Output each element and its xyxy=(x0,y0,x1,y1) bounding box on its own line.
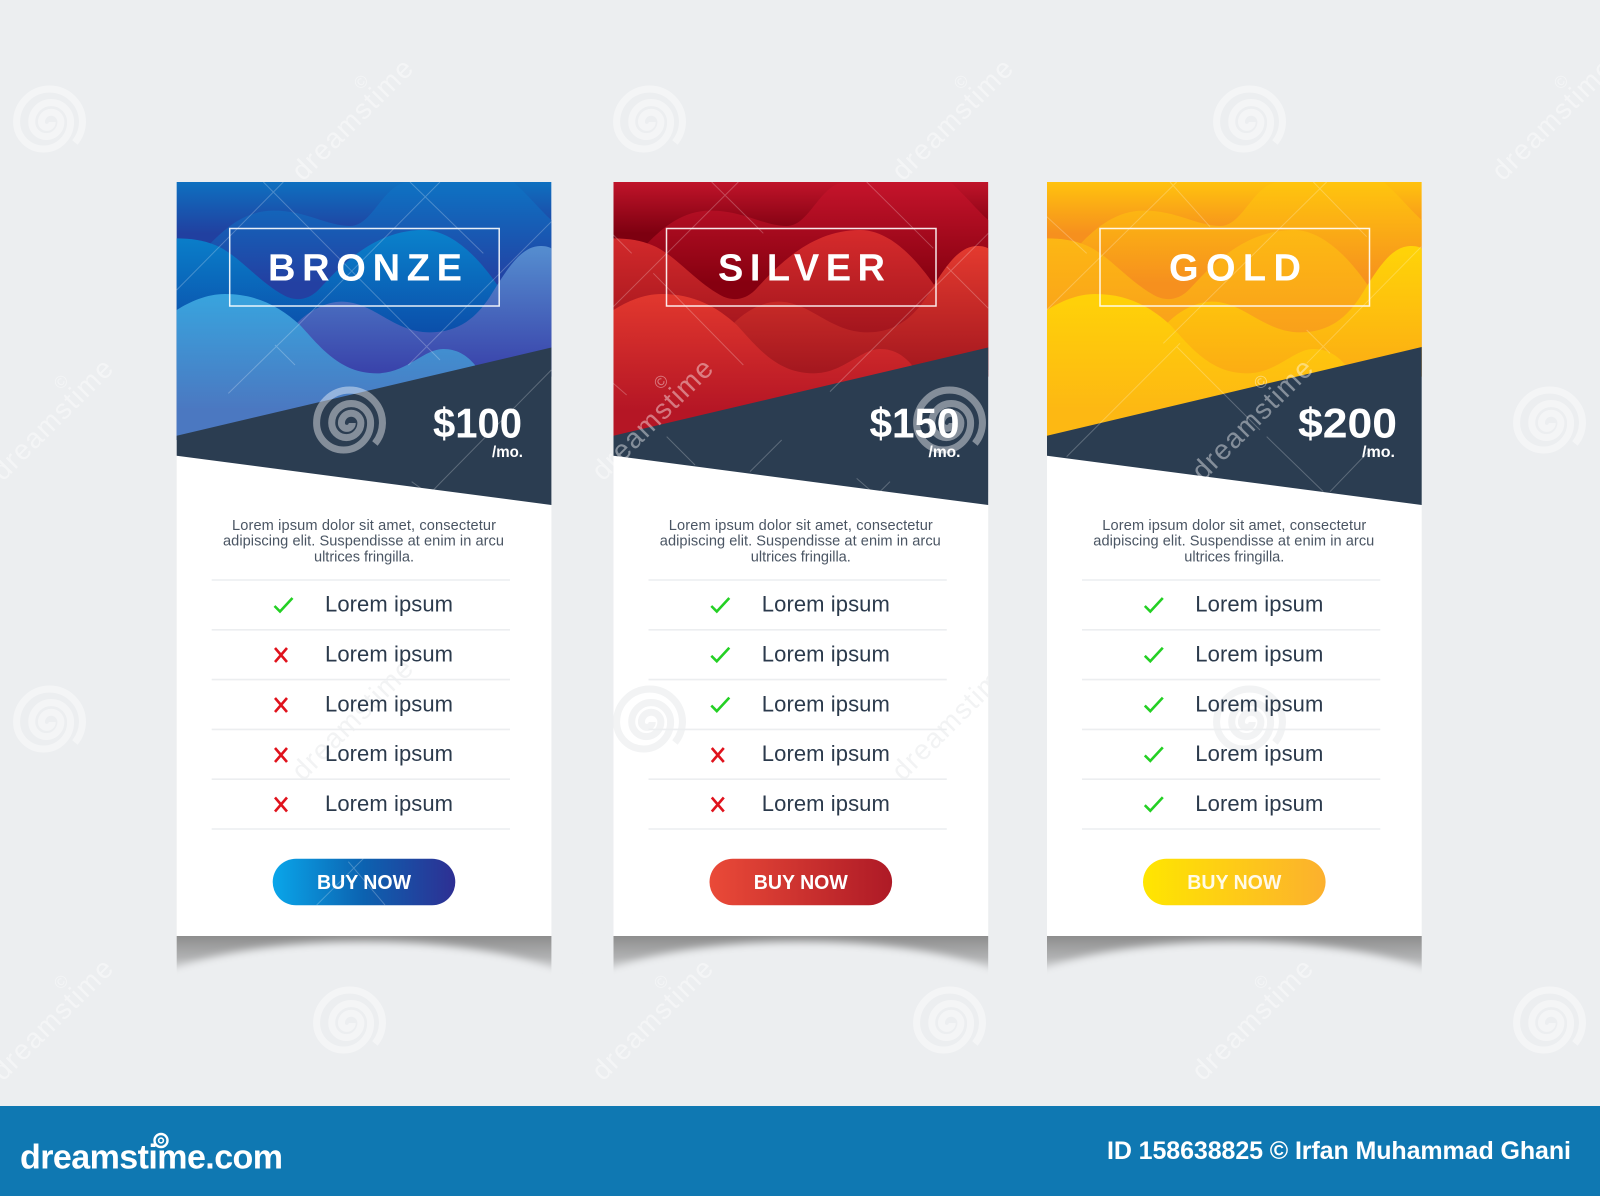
row 3 excluded: Lorem ipsum xyxy=(325,691,453,716)
description xyxy=(223,518,504,566)
watermark diagonal text: dreamstime xyxy=(1185,953,1319,1086)
buy button xyxy=(710,859,892,905)
row 5 included: Lorem ipsum xyxy=(1195,791,1323,816)
row 2 included: Lorem ipsum xyxy=(1195,642,1323,666)
image credit: ID 158638825 © Irfan Muhammad Ghani xyxy=(1107,1137,1571,1165)
wave header xyxy=(177,182,551,440)
panel: gold plan xyxy=(1008,182,1460,1062)
feature list xyxy=(1082,580,1380,829)
feature list xyxy=(648,580,947,829)
feature list xyxy=(212,580,510,829)
watermark diagonal text: © xyxy=(1250,371,1273,393)
row 4 excluded: Lorem ipsum xyxy=(762,741,890,766)
panel: silver plan xyxy=(575,182,1027,1062)
row 1 included: Lorem ipsum xyxy=(762,592,890,617)
card shadow xyxy=(575,936,1027,1062)
faint watermark on card: dreamstime xyxy=(285,653,419,786)
price: $150 xyxy=(870,400,960,447)
watermark diagonal text: dreamstime xyxy=(285,53,419,186)
row 4 excluded: Lorem ipsum xyxy=(325,741,453,766)
card shadow xyxy=(1008,936,1460,1062)
row 5 excluded: Lorem ipsum xyxy=(325,791,453,816)
watermark diagonal text: dreamstime xyxy=(885,53,1019,186)
watermark diagonal text: © xyxy=(1550,71,1573,93)
row 5 excluded: Lorem ipsum xyxy=(762,791,890,816)
row 2 excluded: Lorem ipsum xyxy=(325,642,453,666)
watermark diagonal lines on bronze xyxy=(177,182,551,905)
plan title box xyxy=(1100,228,1370,306)
description: Lorem ipsum dolor sit amet, consectetur xyxy=(1102,518,1366,534)
row 4 included: Lorem ipsum xyxy=(1195,741,1323,766)
price: $200 xyxy=(1298,400,1397,447)
footer logo: dreamstime.com xyxy=(20,1139,283,1177)
price: /mo. xyxy=(1362,444,1395,461)
plan title box: BRONZE xyxy=(268,248,462,290)
watermark diagonal text: © xyxy=(1250,971,1273,993)
description: Lorem ipsum dolor sit amet, consectetur xyxy=(232,518,496,534)
faint watermark on card: dreamstime xyxy=(885,653,1019,786)
faint watermark spiral on card xyxy=(1217,689,1282,749)
buy button xyxy=(273,859,455,905)
plan title box xyxy=(666,228,936,306)
card body xyxy=(1047,182,1422,936)
watermark diagonal text: © xyxy=(350,71,373,93)
watermark diagonal text: © xyxy=(50,371,73,393)
row 3 included: Lorem ipsum xyxy=(762,691,890,716)
description: ultrices fringilla. xyxy=(314,550,414,566)
watermark diagonal text: dreamstime xyxy=(585,353,719,486)
watermark diagonal text: dreamstime xyxy=(1185,353,1319,486)
card shadow xyxy=(138,936,590,1062)
watermark diagonal text: © xyxy=(950,71,973,93)
description: Lorem ipsum dolor sit amet, consectetur xyxy=(669,518,933,534)
wave header xyxy=(1047,182,1422,440)
description: ultrices fringilla. xyxy=(751,550,851,566)
buy button: BUY NOW xyxy=(754,872,848,894)
buy button: BUY NOW xyxy=(1187,872,1281,894)
buy button: BUY NOW xyxy=(317,872,411,894)
dark price band xyxy=(1047,347,1422,505)
description xyxy=(660,518,941,566)
watermark spirals xyxy=(17,89,1582,1050)
plan title box xyxy=(230,228,499,306)
dark price band xyxy=(177,348,551,505)
row 2 included: Lorem ipsum xyxy=(762,642,890,666)
description: adipiscing elit. Suspendisse at enim in arcu xyxy=(223,534,504,550)
watermark diagonal lines on gold xyxy=(1047,182,1421,492)
plan title box: SILVER xyxy=(718,248,885,290)
row 1 included: Lorem ipsum xyxy=(325,592,453,617)
price: /mo. xyxy=(928,444,960,461)
description xyxy=(1093,518,1374,566)
buy button xyxy=(1143,859,1326,905)
wave header xyxy=(613,182,988,440)
description: ultrices fringilla. xyxy=(1184,550,1284,566)
watermark diagonal text: © xyxy=(50,971,73,993)
footer bar xyxy=(0,1106,1600,1196)
watermark diagonal lines on silver xyxy=(613,182,988,492)
price: /mo. xyxy=(492,444,523,461)
watermark diagonal text: dreamstime xyxy=(585,953,719,1086)
faint watermark on card xyxy=(614,676,988,778)
description: adipiscing elit. Suspendisse at enim in arcu xyxy=(1093,534,1374,550)
row 1 included: Lorem ipsum xyxy=(1195,592,1323,617)
row 3 included: Lorem ipsum xyxy=(1195,691,1323,716)
card body xyxy=(177,182,551,936)
description: adipiscing elit. Suspendisse at enim in arcu xyxy=(660,534,941,550)
price: $100 xyxy=(433,400,522,447)
plan title box: GOLD xyxy=(1169,248,1301,290)
card body xyxy=(614,182,988,936)
dark price band xyxy=(614,348,988,505)
watermark diagonal text: © xyxy=(650,371,673,393)
watermark diagonal text: © xyxy=(650,971,673,993)
panel: bronze plan xyxy=(138,182,590,1062)
